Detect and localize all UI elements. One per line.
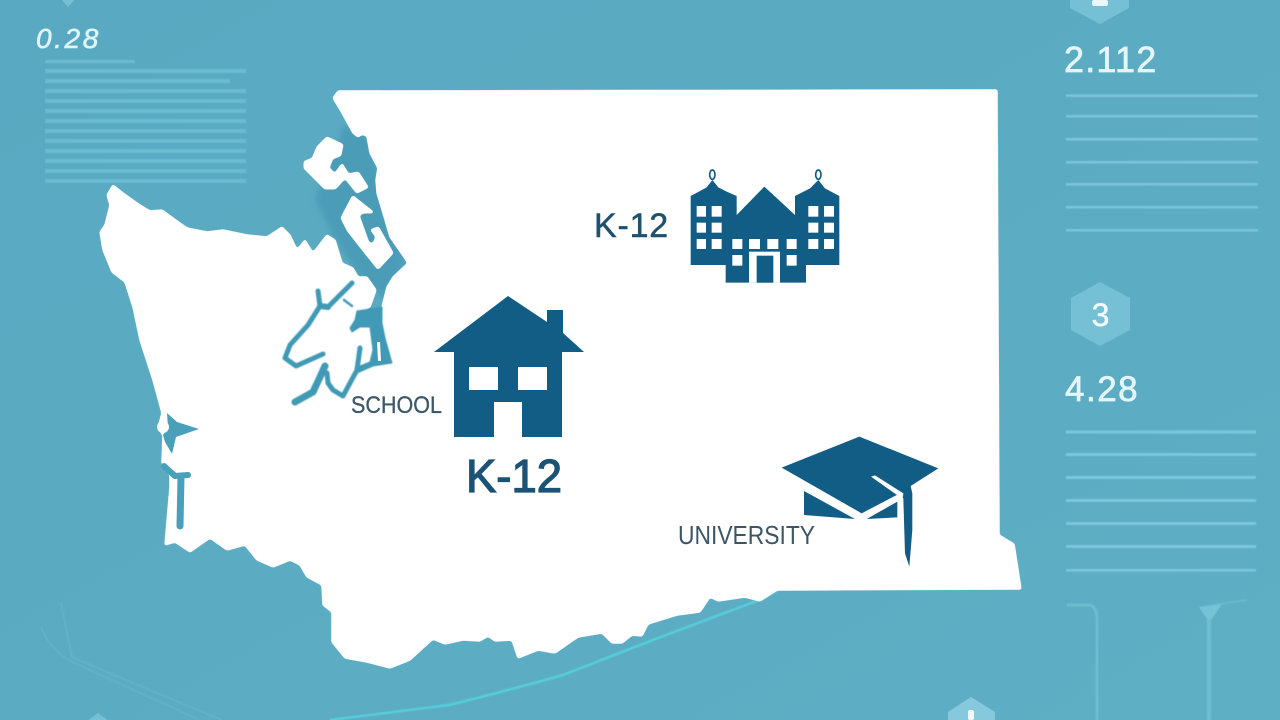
Puget Sound inlets [285, 283, 392, 402]
map of Washington state [100, 90, 1021, 668]
icon: school building with towers [691, 170, 839, 283]
Willapa Bay inlet [164, 466, 188, 526]
icon: graduation cap [782, 437, 938, 567]
bottom decorative curves [41, 590, 778, 720]
label: K-12 beside building: K-12 [594, 207, 669, 245]
label: SCHOOL: SCHOOL [351, 392, 442, 419]
Grays Harbor inlet [157, 413, 199, 454]
left hexagon [55, 0, 82, 7]
top right hexagon [1070, 0, 1129, 24]
bottom right connectors [1067, 600, 1247, 720]
left text lines [45, 60, 246, 183]
bottom hexagons [86, 697, 995, 720]
left value: 0.28 [36, 23, 101, 54]
sliver in sound [377, 342, 381, 361]
lower right text lines [1066, 430, 1256, 572]
strait shadow [315, 125, 405, 300]
hexagon number 3: 3 [1092, 297, 1109, 333]
right stats panel [1064, 0, 1258, 720]
state silhouette and islands [100, 90, 1021, 668]
label: K-12 beneath house: K-12 [466, 450, 562, 502]
top right value: 2.112 [1064, 39, 1157, 80]
hexagon number 3 [1071, 282, 1130, 346]
middle right value: 4.28 [1065, 370, 1139, 409]
left stats panel [36, 0, 246, 183]
top right text lines [1066, 94, 1258, 232]
label: UNIVERSITY: UNIVERSITY [678, 520, 815, 550]
icon: house [434, 296, 584, 437]
